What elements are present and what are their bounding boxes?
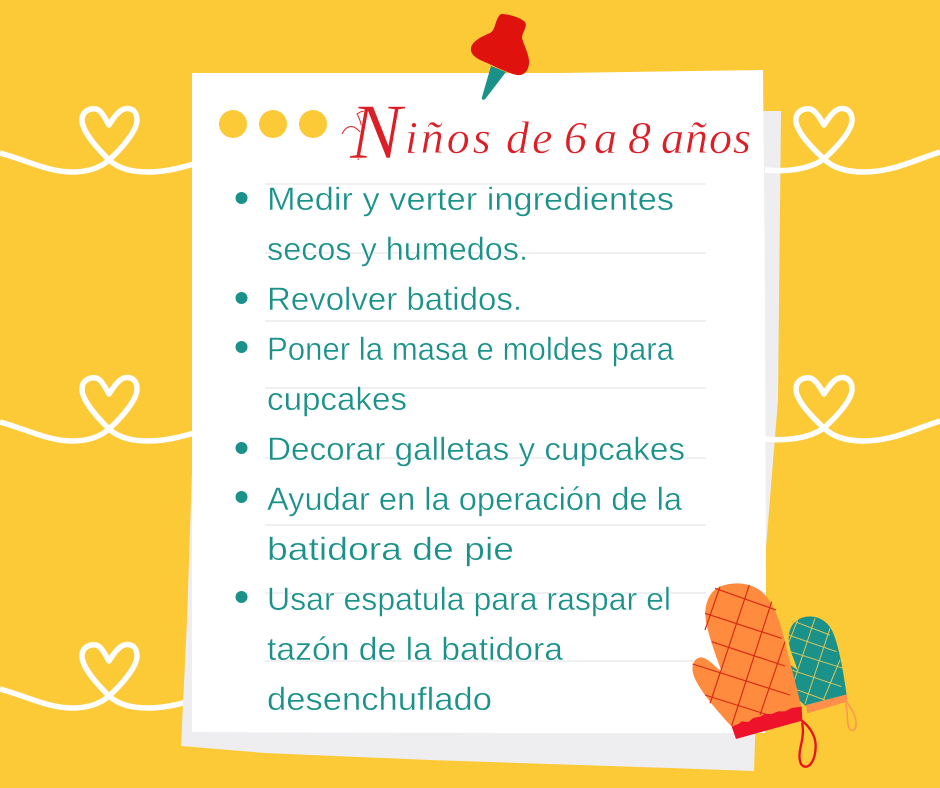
large orange mitt (692, 583, 816, 767)
title (342, 88, 752, 175)
decorative heart line: left bottom (0, 644, 194, 708)
list text (267, 181, 685, 717)
title: 8 (628, 112, 651, 163)
title: 6 (564, 112, 587, 163)
title: a (594, 112, 617, 163)
decorative heart line: right top (765, 108, 940, 172)
list text: Ayudar en la operación de la (267, 481, 682, 517)
grey back sheet (181, 111, 781, 771)
decorative heart line: left top (0, 108, 194, 172)
title: años (661, 112, 752, 163)
list text: Decorar galletas y cupcakes (267, 431, 685, 467)
bullet list (236, 181, 685, 717)
list text: batidora de pie (267, 531, 514, 567)
list text: Medir y verter ingredientes (267, 181, 674, 217)
bullets (236, 192, 248, 603)
list text: Poner la masa e moldes para (267, 331, 674, 367)
title: iños (405, 112, 494, 163)
list text: tazón de la batidora (267, 631, 563, 667)
decorative heart line: right middle (765, 377, 940, 441)
list text: Usar espatula para raspar el (267, 581, 671, 617)
ruled lines (265, 184, 706, 661)
list text: Revolver batidos. (267, 281, 522, 317)
list text: cupcakes (267, 381, 407, 417)
decorative heart line: left middle (0, 377, 194, 441)
three header dots (219, 110, 327, 138)
icon: push pin (471, 14, 529, 100)
white note paper (192, 70, 766, 733)
list text: desenchuflado (267, 681, 492, 717)
title: N (349, 88, 406, 175)
icon: oven mitts (692, 583, 856, 767)
list text: secos y humedos. (267, 231, 528, 267)
small teal mitt (780, 617, 856, 731)
title: de (506, 112, 555, 163)
